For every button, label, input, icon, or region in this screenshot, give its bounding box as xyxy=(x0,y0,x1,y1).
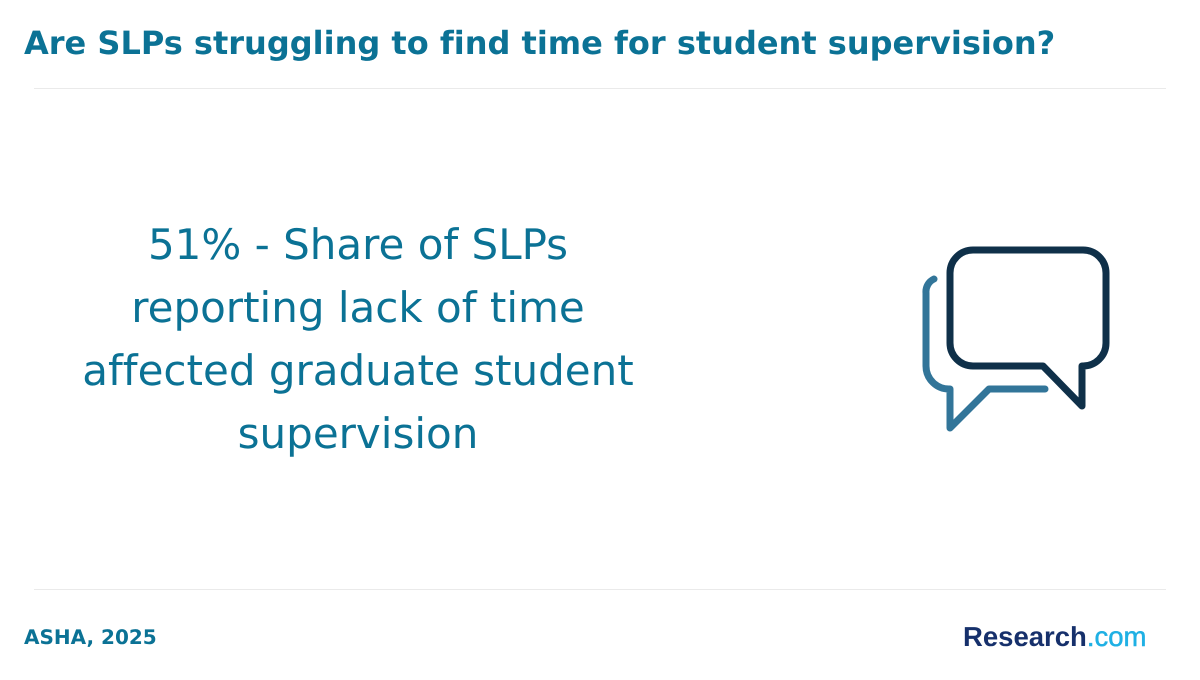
main statistic text: affected graduate student xyxy=(82,346,634,395)
back speech bubble xyxy=(926,279,1045,428)
main statistic text: 51% - Share of SLPs xyxy=(148,220,568,269)
main statistic text xyxy=(82,220,634,458)
front speech bubble xyxy=(950,250,1106,406)
main statistic text: supervision xyxy=(238,409,478,458)
source: ASHA, 2025 xyxy=(24,625,157,649)
icon: speech bubbles xyxy=(922,246,1110,432)
main statistic text: reporting lack of time xyxy=(131,283,585,332)
title: Are SLPs struggling to find time for student supervision? xyxy=(24,24,1055,62)
logo: Research.com xyxy=(963,621,1146,652)
